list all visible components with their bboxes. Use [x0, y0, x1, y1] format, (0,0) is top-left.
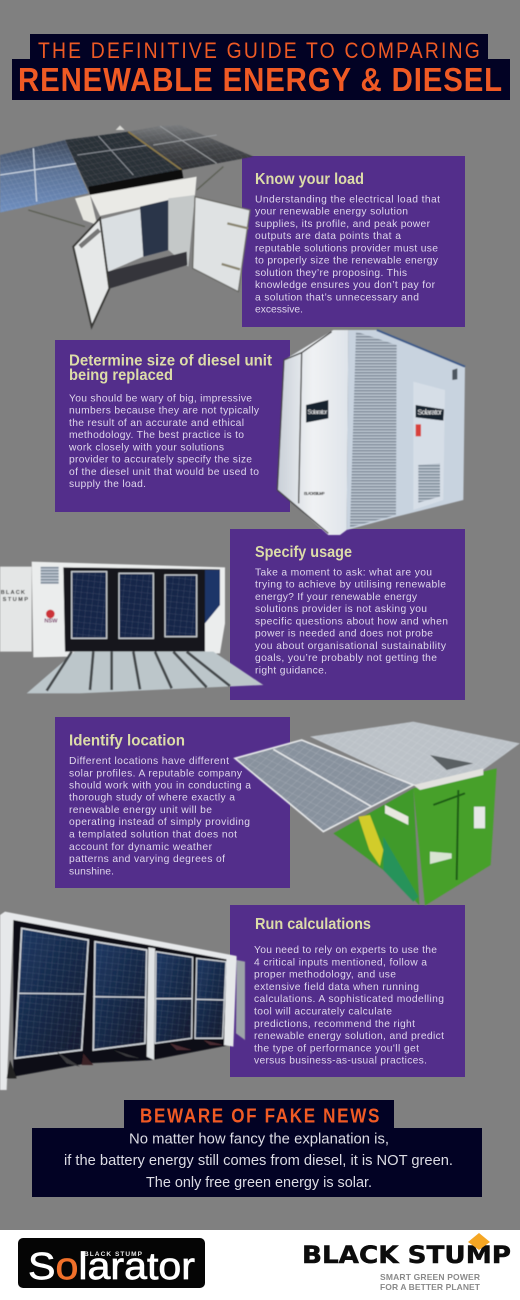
body text: know your load: your renewable energy solution [255, 207, 408, 218]
body text: determine size of diesel unit: provider to accurately specify the size [69, 455, 252, 466]
body text: run calculations: renewable energy solution, and predict [254, 1031, 444, 1042]
body text: identify location [69, 756, 251, 877]
body text: determine size of diesel unit: methodology. The best practice is to [69, 430, 244, 441]
body text: know your load: to properly size the renewable energy [255, 256, 439, 267]
body text: know your load: Understanding the electrical load that [255, 194, 440, 205]
panel: determine size of diesel unit [55, 340, 290, 512]
body text: specify usage: specific questions about how and when [255, 616, 448, 627]
body text: identify location: renewable energy unit will be [69, 805, 212, 816]
body text: run calculations: You need to rely on experts to use the [254, 945, 437, 956]
body text: specify usage: trying to achieve by utilising renewable [255, 580, 446, 591]
body text: determine size of diesel unit: the result of an accurate and ethical [69, 418, 244, 429]
body text: identify location: patterns and varying degrees of [69, 854, 225, 865]
body text: specify usage: goals, you’re probably not getting the [255, 653, 437, 664]
body text: specify usage [255, 567, 448, 676]
body text: know your load: knowledge ensures you don’t pay for [255, 280, 436, 291]
heading: run calculations: Run calculations [255, 916, 371, 933]
panel: identify location [55, 717, 290, 888]
body text: run calculations: versus business-as-usual practices. [254, 1056, 427, 1066]
body text: determine size of diesel unit: supply the load. [69, 479, 146, 490]
body text: identify location: solar profiles. A reputable company [69, 768, 243, 779]
photo: white diesel-replacement container [277, 330, 465, 535]
photo: open container with four solar panels [0, 912, 245, 1090]
body text: know your load: outputs are data points that a [255, 231, 401, 242]
heading: determine size of diesel unit [69, 353, 272, 384]
callout: beware of fake news [32, 1100, 482, 1197]
tagline: SMART GREEN POWER [380, 1272, 480, 1282]
logo: black stump [302, 1233, 511, 1292]
photo: green container with silver solar panels [235, 722, 520, 906]
decal: black stump lettering: BLACK [1, 590, 26, 596]
heading: determine size of diesel unit: Determine size of diesel unit [69, 353, 272, 370]
tagline: FOR A BETTER PLANET [380, 1282, 481, 1292]
body text: know your load: a solution that’s unnecessary and [255, 292, 419, 303]
body text: determine size of diesel unit: numbers because they are not typically [69, 406, 260, 417]
body text: identify location: account for dynamic weather [69, 842, 213, 853]
decal: solarator label on front: Solarator [307, 409, 327, 416]
body text: run calculations: the type of performance you'll get [254, 1043, 419, 1054]
logo: black stump: BLACK STUMP [302, 1241, 511, 1269]
body text: determine size of diesel unit: work closely with your solutions [68, 442, 224, 453]
body text: run calculations: extensive field data when running [254, 982, 419, 993]
body text: specify usage: Take a moment to ask: what are you [255, 567, 432, 578]
heading: specify usage: Specify usage [255, 544, 352, 561]
body text: know your load: supplies, its profile, and peak power [255, 219, 431, 230]
body text: specify usage: power is needed and does not probe [255, 629, 433, 640]
body text: know your load: reputable solutions provider must use [255, 243, 438, 254]
heading: determine size of diesel unit: being replaced [69, 367, 173, 384]
icon: orange diamond [468, 1233, 490, 1250]
body text: determine size of diesel unit: of the diesel unit that would be used to [69, 467, 259, 478]
body text: run calculations: proper methodology, and use [254, 970, 396, 981]
body text: identify location: sunshine. [69, 866, 114, 877]
panel: specify usage [230, 529, 465, 700]
body text: run calculations: tool will accurately calculate [254, 1006, 392, 1018]
callout text: The only free green energy is solar. [146, 1174, 372, 1191]
callout heading: BEWARE OF FAKE NEWS [140, 1104, 381, 1127]
decal: solarator label on door [416, 405, 444, 421]
body text: run calculations: calculations. A sophisticated modelling [254, 994, 444, 1005]
body text: know your load: solution they’re proposing. This [255, 268, 407, 279]
photo: container with three vertical solar panels and ramps [0, 562, 263, 693]
body text: identify location: thorough study of where exactly a [69, 793, 235, 804]
photo: open solar container with roof panels [0, 125, 253, 327]
callout text: if the battery energy still comes from diesel, it is NOT green. [64, 1152, 453, 1169]
body text: know your load: excessive. [255, 305, 303, 316]
body text: specify usage: energy? If your renewable energy [255, 592, 418, 603]
heading: know your load: Know your load [255, 171, 364, 188]
body text: determine size of diesel unit: You should be wary of big, impressive [69, 393, 252, 404]
body text: identify location: operating instead of simply providing [69, 817, 250, 828]
body text: identify location: a templated solution that does not [69, 830, 237, 840]
heading: identify location: Identify location [69, 733, 185, 750]
logo: solarator: Solarator [28, 1246, 195, 1288]
decal: black stump lettering [1, 590, 28, 603]
decal: solarator label on front [306, 400, 328, 423]
body text: specify usage: right guidance. [255, 666, 327, 676]
body text: run calculations [254, 945, 444, 1066]
body text: specify usage: solutions provider is not asking you [255, 604, 427, 615]
tagline [380, 1272, 481, 1292]
body text: know your load [255, 194, 440, 316]
body text: identify location: should work with you in conducting a [69, 780, 251, 792]
title [12, 34, 510, 100]
decal: solarator label on door: Solarator [417, 408, 443, 417]
body text: specify usage: you about organisational sustainability [255, 641, 447, 652]
body text: run calculations: predictions, recommend the right [254, 1019, 415, 1030]
panel: run calculations [230, 905, 465, 1077]
callout text: No matter how fancy the explanation is, [129, 1130, 389, 1148]
footer band [0, 1230, 520, 1300]
body text: determine size of diesel unit [68, 393, 260, 490]
photo: container with three vertical solar panels and ramps: NSW [44, 619, 58, 625]
decal: black stump lettering: STUMP [3, 597, 28, 603]
panel: know your load [242, 156, 465, 327]
body text: identify location: Different locations have different [69, 756, 229, 767]
callout text [64, 1130, 453, 1191]
photo: white diesel-replacement container: BLACK STUMP [304, 491, 325, 496]
logo: solarator: BLACK STUMP [84, 1251, 143, 1258]
body text: run calculations: 4 critical inputs mentioned, follow a [254, 957, 427, 968]
